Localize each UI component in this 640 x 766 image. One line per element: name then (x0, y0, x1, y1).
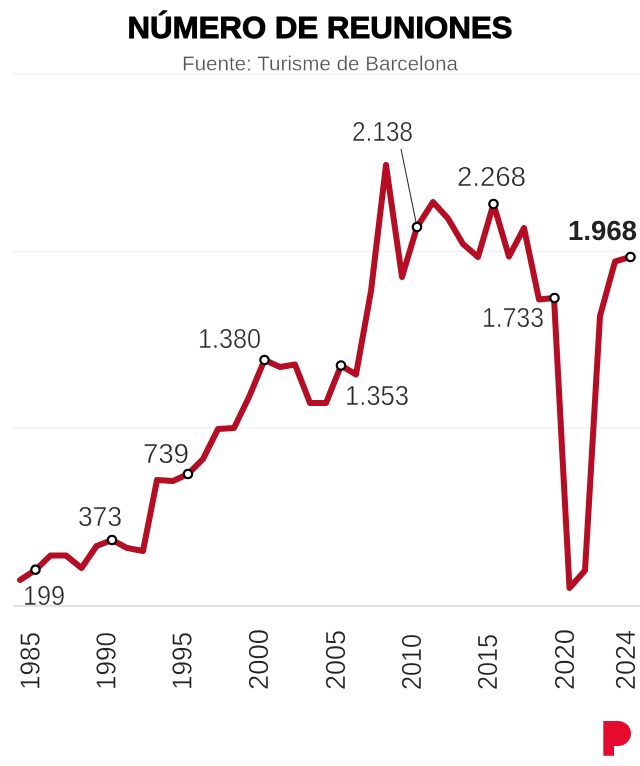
data point markers (31, 200, 635, 574)
value labels: 373 (78, 501, 122, 532)
x-axis year labels: 2000 (243, 629, 274, 690)
value labels: 1.380 (198, 323, 261, 354)
x-axis year labels: 1990 (90, 632, 122, 690)
value labels: 2.268 (457, 161, 526, 192)
value labels: 199 (23, 580, 65, 611)
value labels: 2.138 (352, 116, 413, 147)
logo (603, 721, 631, 756)
x-axis year labels: 2015 (472, 634, 503, 690)
value labels: 1.353 (345, 380, 409, 411)
x-axis year labels (14, 629, 640, 690)
title: NÚMERO DE REUNIONES (128, 9, 512, 45)
value labels: 739 (143, 438, 189, 469)
value labels: 1.733 (482, 302, 544, 333)
leader line for 2.138 (401, 149, 416, 222)
x-axis year labels: 2005 (320, 630, 351, 690)
subtitle: source: Fuente: Turisme de Barcelona (182, 54, 459, 76)
value labels: 1.968 (568, 215, 637, 246)
x-axis year labels: 2010 (396, 634, 427, 690)
value labels (23, 116, 637, 611)
x-axis year labels: 2020 (549, 629, 580, 690)
line chart: meetings per year (20, 165, 630, 588)
x-axis year labels: 1985 (14, 632, 46, 690)
x-axis year labels: 1995 (166, 632, 198, 690)
